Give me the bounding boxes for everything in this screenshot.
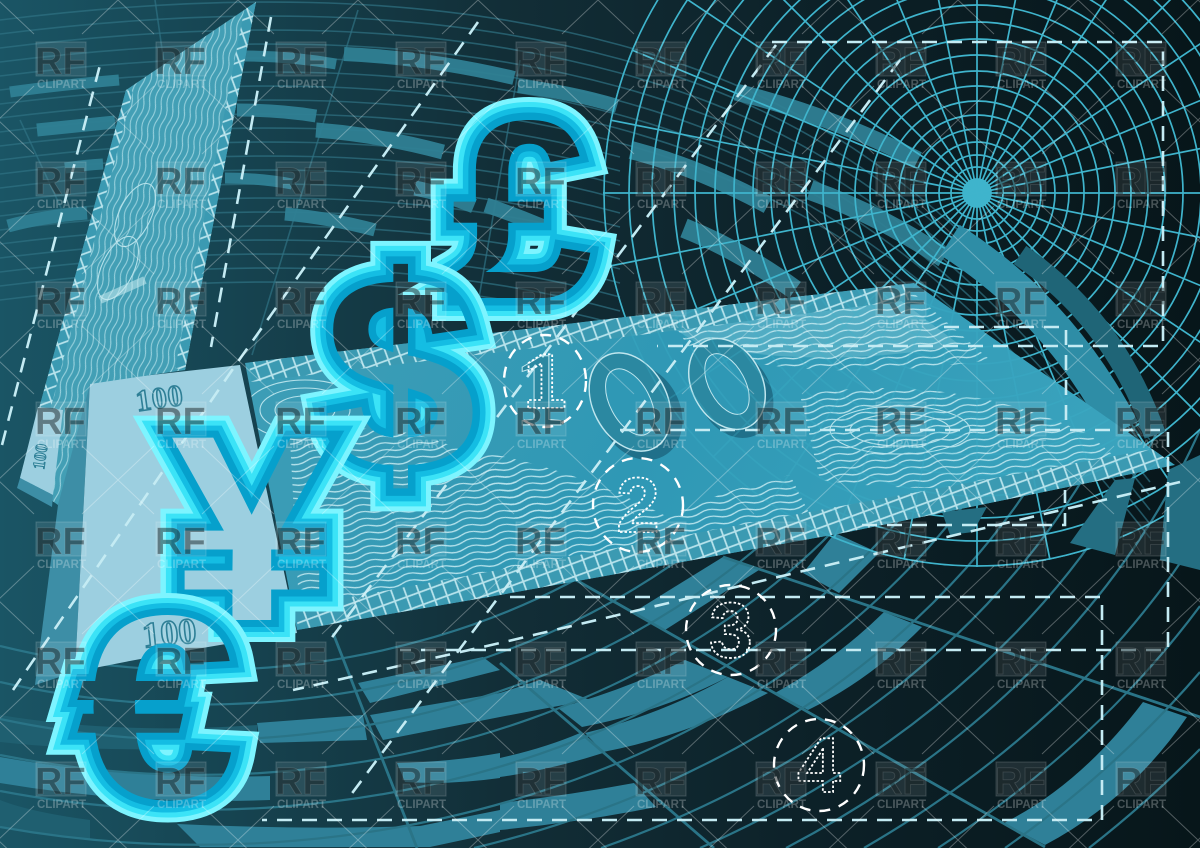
watermarks grid: RF bbox=[1115, 761, 1166, 803]
watermarks grid: RF bbox=[635, 41, 686, 83]
watermarks grid: RF bbox=[635, 521, 686, 563]
watermarks grid: CLIPART bbox=[37, 79, 86, 91]
watermarks grid: CLIPART bbox=[637, 799, 686, 811]
watermarks grid: CLIPART bbox=[997, 799, 1046, 811]
watermarks grid: CLIPART bbox=[997, 319, 1046, 331]
watermarks grid: RF bbox=[515, 761, 566, 803]
watermarks grid: CLIPART bbox=[637, 439, 686, 451]
watermarks grid: RF bbox=[635, 161, 686, 203]
watermarks grid: CLIPART bbox=[277, 679, 326, 691]
watermarks grid: CLIPART bbox=[37, 319, 86, 331]
watermarks grid: CLIPART bbox=[757, 199, 806, 211]
watermarks grid: CLIPART bbox=[157, 799, 206, 811]
watermarks grid: CLIPART bbox=[517, 199, 566, 211]
currency symbol: euro: € bbox=[76, 562, 236, 848]
top arc bands bbox=[8, 54, 944, 290]
watermarks grid: CLIPART bbox=[157, 559, 206, 571]
watermarks grid: CLIPART bbox=[397, 679, 446, 691]
watermarks grid: CLIPART bbox=[757, 679, 806, 691]
watermarks grid: RF bbox=[275, 281, 326, 323]
watermarks grid: RF bbox=[515, 401, 566, 443]
watermarks grid: RF bbox=[35, 761, 86, 803]
currency symbol: pound: £ bbox=[451, 68, 593, 353]
watermarks grid: CLIPART bbox=[877, 799, 926, 811]
watermarks grid: RF bbox=[515, 521, 566, 563]
watermarks grid: CLIPART bbox=[157, 679, 206, 691]
watermarks grid: CLIPART bbox=[877, 319, 926, 331]
watermarks grid: CLIPART bbox=[877, 679, 926, 691]
watermarks grid: CLIPART bbox=[37, 199, 86, 211]
numbered marker 4 bbox=[774, 719, 864, 811]
watermarks grid: RF bbox=[515, 41, 566, 83]
numbered marker 3: 3 bbox=[709, 586, 753, 674]
watermarks grid: CLIPART bbox=[997, 439, 1046, 451]
currency symbol: pound: £ bbox=[451, 68, 593, 353]
watermarks grid: CLIPART bbox=[997, 679, 1046, 691]
watermarks grid: RF bbox=[155, 41, 206, 83]
top arc grid lines bbox=[0, 0, 1150, 538]
currency symbol: pound: £ bbox=[451, 68, 593, 353]
watermarks grid: RF bbox=[155, 161, 206, 203]
watermarks grid: RF bbox=[1115, 161, 1166, 203]
watermarks grid: CLIPART bbox=[517, 679, 566, 691]
watermarks grid: CLIPART bbox=[757, 79, 806, 91]
watermarks grid: RF bbox=[635, 401, 686, 443]
numbered marker 1 bbox=[504, 335, 586, 427]
currency symbol: yen: ¥ bbox=[171, 381, 335, 677]
watermarks grid: RF bbox=[515, 161, 566, 203]
watermarks grid: CLIPART bbox=[637, 319, 686, 331]
watermarks grid: CLIPART bbox=[37, 439, 86, 451]
watermarks grid: CLIPART bbox=[1117, 79, 1166, 91]
watermarks grid: RF bbox=[35, 521, 86, 563]
watermarks grid: CLIPART bbox=[397, 319, 446, 331]
watermarks grid: RF bbox=[875, 521, 926, 563]
watermarks grid: RF bbox=[275, 521, 326, 563]
watermarks grid: RF bbox=[995, 401, 1046, 443]
large curved bands behind the note bbox=[942, 240, 1200, 570]
watermarks grid: CLIPART bbox=[277, 799, 326, 811]
watermarks grid: CLIPART bbox=[277, 559, 326, 571]
denomination 100 lower: 100 bbox=[140, 610, 198, 656]
watermarks grid: CLIPART bbox=[1117, 319, 1166, 331]
watermarks grid: RF bbox=[1115, 41, 1166, 83]
watermarks grid: RF bbox=[995, 641, 1046, 683]
watermarks grid: RF bbox=[1115, 281, 1166, 323]
numbered marker 1: 1 bbox=[523, 337, 567, 425]
corner denomination: 100 bbox=[29, 443, 52, 471]
watermarks grid: RF bbox=[875, 641, 926, 683]
watermarks grid: RF bbox=[995, 521, 1046, 563]
watermarks grid: RF bbox=[395, 41, 446, 83]
watermarks grid: RF bbox=[515, 641, 566, 683]
watermarks grid: RF bbox=[275, 641, 326, 683]
watermarks grid: CLIPART bbox=[157, 439, 206, 451]
watermarks grid: CLIPART bbox=[757, 559, 806, 571]
numbered marker 3 bbox=[686, 585, 776, 675]
currency symbol: dollar: $ bbox=[324, 220, 476, 527]
watermarks grid: RF bbox=[755, 161, 806, 203]
currency symbol: yen: ¥ bbox=[171, 381, 335, 677]
watermarks grid: RF bbox=[755, 521, 806, 563]
watermarks grid: RF bbox=[755, 761, 806, 803]
watermarks grid: CLIPART bbox=[37, 679, 86, 691]
watermarks grid: CLIPART bbox=[637, 679, 686, 691]
watermarks grid: CLIPART bbox=[277, 79, 326, 91]
watermarks grid: CLIPART bbox=[397, 799, 446, 811]
faint web over note bbox=[628, 286, 1160, 531]
watermarks grid: RF bbox=[995, 41, 1046, 83]
numbered marker 2 bbox=[593, 458, 683, 552]
watermarks grid: RF bbox=[35, 281, 86, 323]
watermarks grid: CLIPART bbox=[637, 79, 686, 91]
watermarks grid: CLIPART bbox=[517, 559, 566, 571]
lower arc grid lines bbox=[0, 430, 1200, 848]
watermarks grid: RF bbox=[155, 761, 206, 803]
watermarks grid: CLIPART bbox=[997, 199, 1046, 211]
watermarks grid: RF bbox=[515, 281, 566, 323]
watermarks grid: CLIPART bbox=[397, 559, 446, 571]
watermarks grid: CLIPART bbox=[877, 199, 926, 211]
watermarks grid: CLIPART bbox=[637, 199, 686, 211]
watermarks grid: RF bbox=[155, 641, 206, 683]
currency symbol: dollar: $ bbox=[324, 220, 476, 527]
watermarks grid: RF bbox=[755, 41, 806, 83]
watermarks grid: RF bbox=[275, 161, 326, 203]
banknote: standing sheet bbox=[17, 0, 260, 510]
denomination 100: 100 bbox=[134, 379, 186, 418]
currency symbol: euro: € bbox=[76, 562, 236, 848]
watermarks grid: CLIPART bbox=[1117, 679, 1166, 691]
watermarks grid: CLIPART bbox=[397, 79, 446, 91]
watermarks grid: CLIPART bbox=[517, 799, 566, 811]
numbered marker 4: 4 bbox=[797, 721, 841, 809]
currency symbol: dollar: $ bbox=[324, 220, 476, 527]
big numeral 100 on note bbox=[522, 338, 774, 460]
watermarks grid: RF bbox=[275, 761, 326, 803]
watermarks grid: RF bbox=[995, 161, 1046, 203]
watermarks grid: CLIPART bbox=[517, 79, 566, 91]
watermarks grid: RF bbox=[35, 641, 86, 683]
watermarks grid: RF bbox=[875, 281, 926, 323]
watermarks grid: RF bbox=[395, 281, 446, 323]
watermarks grid: RF bbox=[35, 161, 86, 203]
note engraving bbox=[245, 287, 1165, 625]
watermarks grid: CLIPART bbox=[157, 79, 206, 91]
watermarks grid: CLIPART bbox=[277, 199, 326, 211]
numbered marker 2: 2 bbox=[616, 461, 660, 549]
watermarks grid: CLIPART bbox=[877, 559, 926, 571]
watermarks grid: RF bbox=[635, 281, 686, 323]
watermarks grid: CLIPART bbox=[517, 439, 566, 451]
watermarks grid: CLIPART bbox=[757, 319, 806, 331]
watermarks grid: RF bbox=[875, 401, 926, 443]
currency symbol: yen: ¥ bbox=[171, 381, 335, 677]
watermarks grid: CLIPART bbox=[757, 799, 806, 811]
watermarks grid: RF bbox=[755, 281, 806, 323]
watermarks grid: CLIPART bbox=[877, 79, 926, 91]
watermarks grid: RF bbox=[35, 41, 86, 83]
watermarks grid: RF bbox=[875, 161, 926, 203]
watermarks grid: RF bbox=[995, 281, 1046, 323]
watermarks grid: RF bbox=[395, 521, 446, 563]
big numeral 100 on note: 1 bbox=[514, 331, 566, 448]
currency symbol: euro: € bbox=[76, 562, 236, 848]
currency symbol: dollar: $ bbox=[324, 220, 476, 527]
watermarks grid: RF bbox=[395, 161, 446, 203]
watermarks grid: RF bbox=[395, 761, 446, 803]
watermarks grid: RF bbox=[875, 41, 926, 83]
watermarks grid: RF bbox=[275, 401, 326, 443]
watermarks grid: RF bbox=[275, 41, 326, 83]
watermarks grid: RF bbox=[1115, 401, 1166, 443]
banknote: main, in perspective bbox=[245, 283, 1175, 630]
watermarks grid: CLIPART bbox=[397, 199, 446, 211]
watermarks grid: CLIPART bbox=[997, 79, 1046, 91]
watermarks grid: CLIPART bbox=[397, 439, 446, 451]
currency symbol: yen: ¥ bbox=[171, 381, 335, 677]
currency symbol: euro: € bbox=[76, 562, 236, 848]
watermarks grid: RF bbox=[875, 761, 926, 803]
watermarks grid: RF bbox=[995, 761, 1046, 803]
watermarks grid: CLIPART bbox=[1117, 199, 1166, 211]
watermarks grid: RF bbox=[155, 521, 206, 563]
watermarks grid: RF bbox=[155, 401, 206, 443]
watermarks grid: CLIPART bbox=[157, 319, 206, 331]
watermarks grid: RF bbox=[395, 401, 446, 443]
watermarks grid: CLIPART bbox=[37, 799, 86, 811]
watermarks grid: RF bbox=[755, 641, 806, 683]
watermarks grid: RF bbox=[35, 401, 86, 443]
watermarks grid: CLIPART bbox=[997, 559, 1046, 571]
watermarks grid: RF bbox=[395, 641, 446, 683]
radial web bbox=[603, 0, 1200, 567]
watermarks grid: RF bbox=[635, 641, 686, 683]
watermarks grid: CLIPART bbox=[637, 559, 686, 571]
watermarks grid: CLIPART bbox=[757, 439, 806, 451]
watermarks grid: RF bbox=[635, 761, 686, 803]
watermarks grid: RF bbox=[1115, 641, 1166, 683]
watermarks grid: CLIPART bbox=[877, 439, 926, 451]
banknote: pale end panel bbox=[35, 365, 297, 685]
currency symbol: pound: £ bbox=[451, 68, 593, 353]
watermarks grid: RF bbox=[155, 281, 206, 323]
watermarks grid: CLIPART bbox=[277, 319, 326, 331]
watermarks grid: CLIPART bbox=[1117, 439, 1166, 451]
watermarks grid: CLIPART bbox=[517, 319, 566, 331]
watermarks grid: CLIPART bbox=[277, 439, 326, 451]
watermarks grid: CLIPART bbox=[1117, 799, 1166, 811]
lower arc bands bbox=[0, 533, 1187, 847]
watermarks grid: CLIPART bbox=[1117, 559, 1166, 571]
watermarks grid: CLIPART bbox=[157, 199, 206, 211]
watermarks grid: CLIPART bbox=[37, 559, 86, 571]
watermarks grid: RF bbox=[1115, 521, 1166, 563]
pale corner bbox=[20, 407, 63, 495]
watermarks grid: RF bbox=[755, 401, 806, 443]
